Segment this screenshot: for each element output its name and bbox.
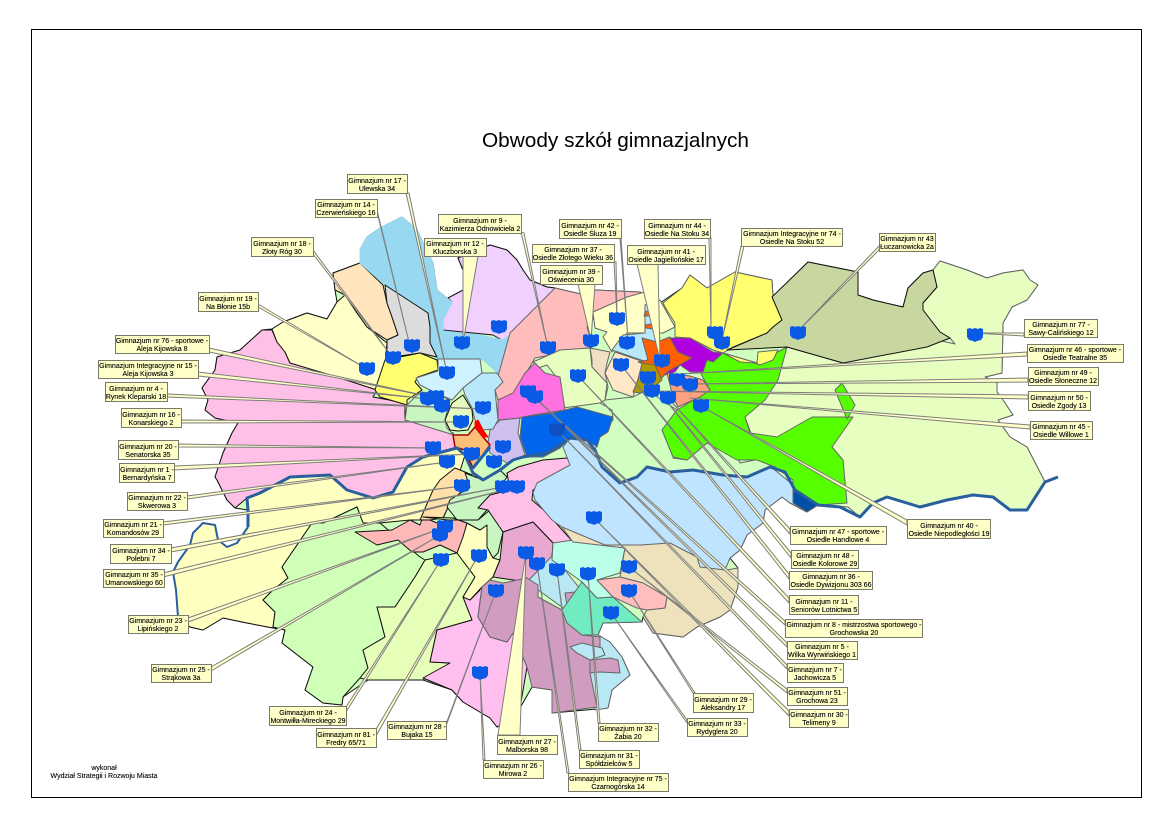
district: cream north — [593, 292, 675, 352]
label: 75: Czarnogórska 14 — [591, 784, 645, 791]
label: 51 — [788, 688, 848, 706]
label: 17: Ulewska 34 — [359, 186, 395, 193]
label: 30: Telimeny 9 — [802, 720, 836, 727]
label: 29: Gimnazjum nr 29 - — [694, 697, 752, 704]
city base outline — [173, 217, 1045, 727]
credit text: wykonał — [90, 765, 117, 772]
label: 8: Gimnazjum nr 8 - mistrzostwa sportowego - — [787, 622, 922, 629]
label: 28: Bujaka 15 — [401, 732, 433, 739]
district: orange fragment north — [644, 310, 650, 316]
district: dark blue patch — [793, 490, 818, 512]
leader: 39 — [578, 284, 595, 340]
leader: 47 — [668, 398, 790, 534]
district: lilac north — [443, 245, 557, 343]
label: 36: Gimnazjum nr 36 - — [802, 574, 860, 581]
label: 75 — [568, 774, 668, 792]
label: 22: Skwerowa 3 — [138, 503, 176, 510]
label: 16: Konarskiego 2 — [129, 420, 173, 427]
label: 46: Osiedle Teatralne 35 — [1043, 355, 1107, 362]
label: 49: Osiedle Słoneczne 12 — [1029, 378, 1097, 385]
district: turquoise — [562, 582, 642, 635]
label: 76: Gimnazjum nr 76 - sportowe - — [116, 338, 209, 345]
district: pale yellow south centre — [457, 523, 500, 600]
leader: 19 — [258, 304, 367, 369]
label: 39 — [540, 266, 602, 284]
district: red sliver — [475, 420, 488, 437]
label: 20 — [118, 440, 178, 460]
label: 34 — [110, 544, 172, 564]
label: 47 — [790, 526, 886, 544]
leader: 4 — [167, 394, 483, 409]
label: 9 — [438, 214, 522, 234]
district: pale peach north — [605, 352, 647, 397]
label: 22: Gimnazjum nr 22 - — [128, 495, 186, 502]
label: 74 — [742, 228, 842, 246]
leader: 1 — [174, 454, 472, 470]
district: dusty mauve south — [478, 578, 600, 713]
label: 45 — [1030, 422, 1092, 440]
leader: 51 — [629, 567, 787, 693]
district: old town — [445, 395, 473, 431]
district: purple — [665, 338, 723, 375]
school icons — [359, 312, 983, 680]
district: pale green south-west — [263, 507, 425, 705]
label: 7 — [788, 664, 844, 682]
label: 81: Fredry 65/71 — [326, 740, 366, 747]
label: 34: Polebni 7 — [126, 556, 156, 563]
label: 50 — [1028, 392, 1090, 410]
label: 19 — [198, 292, 258, 312]
leader: 15 — [198, 372, 428, 399]
label: 24: Gimnazjum nr 24 - — [279, 710, 337, 717]
label: 19: Na Błonie 15b — [206, 304, 250, 311]
district: sky blue north — [360, 217, 510, 375]
label: 23: Gimnazjum nr 23 - — [129, 618, 187, 625]
district: salmon east — [667, 373, 710, 407]
district: pale lime east — [745, 261, 1045, 517]
label: 32 — [598, 724, 658, 742]
district: peach north-west — [333, 263, 398, 340]
leader: 22 — [187, 462, 447, 499]
label: 77: Gimnazjum nr 77 - — [1032, 322, 1090, 329]
district: mauve south — [493, 522, 553, 582]
label: 37: Gimnazjum nr 37 - — [544, 247, 602, 254]
district: salmon south-west — [355, 517, 467, 553]
label: 12: Kluczborska 3 — [433, 249, 477, 256]
label: 31 — [580, 750, 640, 768]
label: 27: Gimnazjum nr 27 - — [498, 739, 556, 746]
callout labels — [98, 174, 1124, 792]
district: light blue north — [612, 303, 660, 362]
label: 48: Osiedle Kolorowe 29 — [793, 561, 857, 568]
label: 27: Malborska 98 — [506, 747, 548, 754]
river channel — [473, 447, 490, 468]
leader: 74 — [722, 246, 744, 340]
label: 43: Gimnazjum nr 43 — [880, 236, 934, 243]
title: Obwody szkół gimnazjalnych — [482, 130, 749, 152]
district: pale green centre east — [595, 390, 793, 483]
label: 27 — [498, 736, 558, 754]
leader: 30 — [594, 518, 789, 716]
leader: 40 — [701, 406, 907, 525]
label: 46 — [1028, 344, 1124, 362]
label: 1: Bernardyńska 7 — [122, 475, 172, 482]
leader: 16 — [181, 420, 461, 423]
label: 45: Osiedle Willowe 1 — [1033, 432, 1089, 439]
district: olive — [633, 363, 662, 393]
label: 36: Osiedle Dywizjonu 303 66 — [791, 582, 872, 589]
label: 7: Gimnazjum nr 7 - — [788, 667, 843, 674]
label: 40 — [908, 520, 990, 538]
leader: 14 — [377, 210, 410, 346]
leader: 7 — [557, 430, 787, 669]
label: 75: Gimnazjum Integracyjne nr 75 - — [569, 776, 667, 783]
district: bright yellow north-east — [663, 272, 782, 353]
label: 37 — [532, 244, 614, 262]
district: pale turquoise — [552, 540, 625, 598]
district: pale yellow north-west — [272, 295, 387, 390]
leader: 81 — [375, 556, 478, 736]
label: 47: Osiedle Handlowe 4 — [807, 537, 869, 544]
district: bright green — [662, 347, 853, 505]
label: 12: Gimnazjum nr 12 - — [426, 241, 484, 248]
leader: 33 — [611, 613, 687, 723]
label: 51: Gimnazjum nr 51 - — [788, 690, 846, 697]
leader: 9 — [521, 232, 548, 348]
district: pale lime south-west — [360, 553, 475, 680]
label: 76: Aleja Kijowska 8 — [137, 346, 188, 353]
district: mauve inset north — [565, 592, 577, 607]
label: 30: Gimnazjum nr 30 - — [790, 712, 848, 719]
leader: 36 — [621, 365, 789, 579]
label: 4: Gimnazjum nr 4 - — [109, 386, 164, 393]
district: inset blue — [570, 643, 605, 660]
district: gray north-west — [385, 285, 437, 358]
label: 15 — [98, 360, 198, 378]
leader: 26 — [480, 673, 485, 760]
label: 11: Gimnazjum nr 11 - — [795, 599, 853, 606]
leader lines — [163, 193, 1030, 773]
label: 24: Montwiłła-Mireckiego 29 — [270, 718, 346, 725]
label: 48: Gimnazjum nr 48 - — [796, 553, 854, 560]
district: orange-red — [638, 337, 692, 380]
label: 19: Gimnazjum nr 19 - — [199, 296, 257, 303]
label: 1 — [120, 464, 175, 482]
label: 46: Gimnazjum nr 46 - sportowe - — [1029, 347, 1122, 354]
leader: 41 — [637, 264, 660, 360]
leader: 8 — [528, 392, 785, 625]
label: 4: Rynek Kleparski 18 — [106, 394, 166, 401]
label: 26 — [484, 760, 544, 778]
label: 40: Osiedle Niepodległości 19 — [909, 531, 990, 538]
label: 35 — [104, 570, 164, 588]
leader: 48 — [648, 378, 791, 558]
label: 41: Gimnazjum nr 41 - — [637, 249, 695, 256]
district: khaki north-east — [727, 262, 950, 363]
leader: 24 — [346, 560, 441, 712]
district: pale green south centre — [423, 510, 503, 558]
label: 42: Osiedle Śluza 19 — [564, 229, 617, 238]
leader: 5 — [535, 397, 787, 647]
label: 15: Aleja Kijowska 3 — [123, 371, 174, 378]
label: 33 — [688, 718, 748, 736]
leader: 37 — [614, 262, 617, 317]
label: 31: Gimnazjum nr 31 - — [580, 753, 638, 760]
leader: 49 — [690, 378, 1028, 384]
river Vistula — [247, 438, 1058, 527]
leader: 23 — [188, 527, 445, 622]
district: peach by river — [420, 468, 472, 520]
leader: 35 — [163, 487, 517, 577]
label: 49 — [1028, 368, 1098, 386]
label: 35: Gimnazjum nr 35 - — [105, 572, 163, 579]
label: 8 — [786, 620, 922, 638]
label: 77 — [1024, 320, 1098, 338]
label: 35: Umanowskiego 60 — [105, 580, 163, 587]
label: 1: Gimnazjum nr 1 - — [120, 467, 175, 474]
label: 15: Gimnazjum Integracyjne nr 15 - — [99, 363, 197, 370]
leader: 45 — [690, 398, 1030, 429]
label: 25 — [152, 664, 212, 682]
label: 14 — [316, 200, 378, 218]
label: 20: Senatorska 35 — [125, 452, 171, 459]
label: 21: Gimnazjum nr 21 - — [104, 522, 162, 529]
label: 4 — [106, 382, 168, 402]
label: 18: Gimnazjum nr 18 - — [253, 241, 311, 248]
label: 9: Kazimierza Odnowiciela 2 — [440, 226, 520, 233]
label: 48 — [792, 550, 858, 568]
district: orange centre — [453, 427, 490, 468]
label: 37: Osiedle Złotego Wieku 36 — [533, 255, 613, 262]
district: pale yellow south-west — [173, 448, 465, 630]
label: 23: Lipińskiego 2 — [138, 626, 179, 633]
label: 43 — [880, 234, 936, 252]
district: pale green city west — [405, 392, 454, 435]
label: 40: Gimnazjum nr 40 - — [920, 523, 978, 530]
district: tan north — [590, 348, 610, 400]
label: 9: Gimnazjum nr 9 - — [453, 218, 508, 225]
leader: 21 — [163, 486, 462, 525]
label: 7: Jachowicza 5 — [794, 675, 836, 682]
label: 29 — [694, 694, 754, 712]
leader: 76 — [209, 348, 436, 398]
label: 5: Gimnazjum nr 5 - — [795, 644, 850, 651]
leader: 18 — [313, 250, 393, 358]
label: 24 — [270, 706, 346, 726]
label: 28 — [388, 722, 446, 740]
label: 5 — [788, 642, 858, 660]
label: 26: Mirowa 2 — [499, 771, 527, 778]
credit text — [51, 765, 158, 780]
map: school districts west and south — [173, 217, 573, 727]
district: mauve inset east — [590, 658, 620, 673]
label: 81: Gimnazjum nr 81 - — [317, 732, 375, 739]
label: 11: Seniorów Lotnictwa 5 — [791, 607, 857, 614]
district: light blue south — [527, 555, 630, 710]
label: 32: Żabia 20 — [614, 732, 642, 741]
label: 49: Gimnazjum nr 49 - — [1034, 370, 1092, 377]
label: 43: Łuczanowicka 2a — [880, 244, 934, 251]
district: orange fragment south — [645, 324, 653, 329]
district: pale blue city north — [416, 359, 482, 400]
district: light blue city — [463, 373, 503, 430]
label: 21: Komandosów 29 — [107, 530, 159, 537]
label: 76 — [116, 336, 210, 354]
district: pink south of river — [478, 458, 573, 543]
district: pale green south of river — [447, 470, 507, 520]
label: 33: Rydyglera 20 — [696, 729, 738, 736]
leader: 31 — [557, 570, 581, 750]
leader: 46 — [680, 352, 1027, 374]
label: 23 — [128, 616, 188, 634]
label: 29: Aleksandry 17 — [701, 705, 745, 712]
label: 42: Gimnazjum nr 42 - — [561, 223, 619, 230]
leader: 34 — [171, 487, 503, 552]
label: 36 — [790, 572, 872, 590]
district: light blue large south-east — [533, 438, 818, 570]
label: 5: Wilka Wyrwińskiego 1 — [788, 652, 856, 659]
district: lavender — [488, 418, 525, 463]
label: 12 — [424, 238, 486, 256]
label: 31: Spółdzielców 5 — [586, 761, 632, 768]
label: 8: Grochowska 20 — [830, 630, 878, 637]
district: salmon south-east — [597, 577, 667, 610]
credit text: Wydział Strategii i Rozwoju Miasta — [51, 773, 158, 780]
label: 41 — [628, 246, 706, 264]
district: pink west — [202, 330, 457, 508]
leader: 11 — [578, 376, 789, 603]
leader: 77 — [975, 333, 1024, 336]
leader: 29 — [629, 591, 695, 693]
label: 45: Gimnazjum nr 45 - — [1032, 424, 1090, 431]
label: 74: Osiedle Na Stoku 52 — [760, 239, 824, 246]
label: 74: Gimnazjum Integracyjne nr 74 - — [743, 231, 841, 238]
label: 26: Gimnazjum nr 26 - — [484, 763, 542, 770]
district: salmon north — [495, 288, 660, 400]
label: 34: Gimnazjum nr 34 - — [112, 548, 170, 555]
label: 18: Złoty Róg 30 — [262, 249, 302, 256]
label: 44 — [644, 220, 710, 238]
label: 39: Oświecenia 30 — [548, 277, 594, 284]
label: 16 — [122, 408, 182, 428]
leader: 25 — [211, 535, 440, 671]
leader: 50 — [652, 391, 1028, 399]
label: 25: Strąkowa 3a — [162, 675, 201, 682]
district: tan south-east — [562, 527, 738, 637]
leader: 44 — [709, 238, 711, 330]
leader: 42 — [620, 238, 628, 340]
leader: 75 — [537, 564, 569, 773]
label: 81 — [316, 728, 376, 748]
label: 17: Gimnazjum nr 17 - — [348, 178, 406, 185]
leader: 32 — [588, 574, 600, 723]
label: 28: Gimnazjum nr 28 - — [388, 724, 446, 731]
label: 44: Osiedle Na Stoku 34 — [645, 231, 709, 238]
district: bright blue — [520, 407, 613, 457]
label: 11 — [790, 596, 858, 614]
label: 50: Gimnazjum nr 50 - — [1030, 395, 1088, 402]
label: 41: Osiedle Jagiellońskie 17 — [628, 257, 704, 264]
label: 51: Grochowa 23 — [796, 698, 838, 705]
label: 44: Gimnazjum nr 44 - — [648, 223, 706, 230]
label: 33: Gimnazjum nr 33 - — [688, 721, 746, 728]
label: 17 — [348, 174, 408, 194]
label: 32: Gimnazjum nr 32 - — [599, 726, 657, 733]
district: magenta — [498, 363, 565, 420]
label: 50: Osiedle Zgody 13 — [1032, 403, 1087, 410]
label: 20: Gimnazjum nr 20 - — [119, 444, 177, 451]
leader: 27 — [498, 553, 526, 735]
leader: 17 — [406, 193, 447, 373]
label: 30 — [790, 710, 848, 728]
leader: 12 — [463, 256, 478, 343]
label: 25: Gimnazjum nr 25 - — [152, 667, 210, 674]
label: 22 — [128, 492, 188, 510]
leader: 43 — [798, 245, 880, 331]
label: 14: Czerwieńskiego 16 — [316, 210, 376, 217]
map: school districts centre — [405, 261, 1045, 713]
district: yellow sliver — [723, 350, 778, 365]
label: 47: Gimnazjum nr 47 - sportowe - — [792, 529, 885, 536]
leader: 28 — [446, 591, 496, 726]
label: 14: Gimnazjum nr 14 - — [317, 202, 375, 209]
river west loop — [173, 523, 248, 617]
label: 39: Gimnazjum nr 39 - — [542, 269, 600, 276]
label: 16: Gimnazjum nr 16 - — [122, 412, 180, 419]
district: pink south — [423, 587, 527, 727]
label: 42 — [560, 220, 622, 238]
district: pale green north centre — [533, 348, 607, 408]
label: 18 — [252, 238, 314, 256]
district: bright yellow — [375, 353, 438, 405]
label: 77: Sawy-Calińskiego 12 — [1028, 330, 1094, 337]
label: 21 — [104, 520, 164, 538]
leader: 20 — [178, 444, 433, 448]
district: bright green island — [835, 383, 855, 419]
